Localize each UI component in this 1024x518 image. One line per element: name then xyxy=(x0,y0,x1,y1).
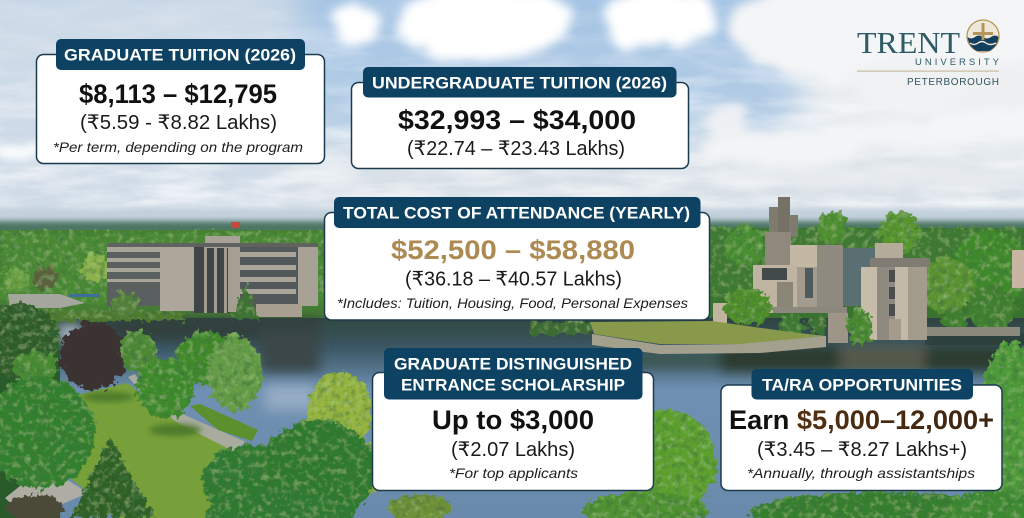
clouds xyxy=(0,0,1024,188)
rupee range: (₹3.45 – ₹8.27 Lakhs+) xyxy=(757,439,967,461)
panel: total cost of attendance xyxy=(324,197,710,320)
tuition range: $8,113 – $12,795 xyxy=(79,79,277,109)
left parking and shore xyxy=(8,294,100,308)
heading pill: GRADUATE TUITION (2026) xyxy=(64,46,296,64)
peninsula lawn and stone wall xyxy=(590,321,826,354)
left shore conifer xyxy=(111,286,259,319)
brown shrub xyxy=(7,494,63,518)
heading pill: ENTRANCE SCHOLARSHIP xyxy=(401,376,625,394)
dark leaf tree xyxy=(59,322,127,390)
heading pill xyxy=(56,39,305,70)
heading pill xyxy=(334,197,700,228)
earnings range: Earn $5,000–12,000+ xyxy=(729,405,994,435)
horizon haze xyxy=(0,208,1024,222)
rupee range: (₹36.18 – ₹40.57 Lakhs) xyxy=(405,268,622,290)
logo wordmark: TRENT xyxy=(857,25,960,60)
panel: graduate tuition xyxy=(36,39,324,164)
logo university line: UNIVERSITY xyxy=(915,57,1000,68)
heading pill: TOTAL COST OF ATTENDANCE (YEARLY) xyxy=(343,204,690,222)
logo emblem xyxy=(967,20,999,52)
footnote: *Per term, depending on the program xyxy=(53,139,303,155)
right shrubs xyxy=(530,289,873,345)
heading pill xyxy=(363,67,676,98)
footnote: *Annually, through assistantships xyxy=(747,465,975,481)
heading pill: GRADUATE DISTINGUISHED xyxy=(394,354,632,374)
sky xyxy=(0,0,1024,232)
heading pill xyxy=(752,369,973,400)
water reflections xyxy=(58,318,1024,410)
rupee range: (₹22.74 – ₹23.43 Lakhs) xyxy=(407,138,625,160)
heading pill: TA/RA OPPORTUNITIES xyxy=(762,376,962,394)
far right low building xyxy=(1012,250,1024,288)
background trees xyxy=(0,212,1024,333)
lawn and path xyxy=(5,374,258,518)
logo: Trent University Peterborough xyxy=(857,20,1000,88)
panel: undergraduate tuition xyxy=(352,67,688,168)
foreground trees xyxy=(0,302,1024,518)
footnote: *Includes: Tuition, Housing, Food, Personal Expenses xyxy=(337,295,688,311)
water xyxy=(60,318,1024,518)
stone wall east of building xyxy=(927,327,1020,336)
rupee range: (₹5.59 - ₹8.82 Lakhs) xyxy=(80,112,277,134)
streaky cloud texture xyxy=(0,0,1024,215)
scholarship amount: Up to $3,000 xyxy=(432,405,594,435)
left campus building xyxy=(107,222,318,317)
footnote: *For top applicants xyxy=(449,465,578,481)
panel: TA/RA opportunities xyxy=(721,369,1002,490)
panel: entrance scholarship xyxy=(372,348,654,490)
right campus building xyxy=(713,197,930,343)
total cost range: $52,500 – $58,880 xyxy=(391,235,635,265)
heading pill: UNDERGRADUATE TUITION (2026) xyxy=(372,74,667,92)
tree mass base xyxy=(0,228,1024,518)
tuition range: $32,993 – $34,000 xyxy=(398,105,636,135)
heading pill xyxy=(384,348,642,400)
logo location: PETERBOROUGH xyxy=(907,77,999,88)
distant tree line xyxy=(0,221,1024,235)
rupee amount: (₹2.07 Lakhs) xyxy=(451,439,575,461)
pale haze over the sky xyxy=(0,0,1024,230)
